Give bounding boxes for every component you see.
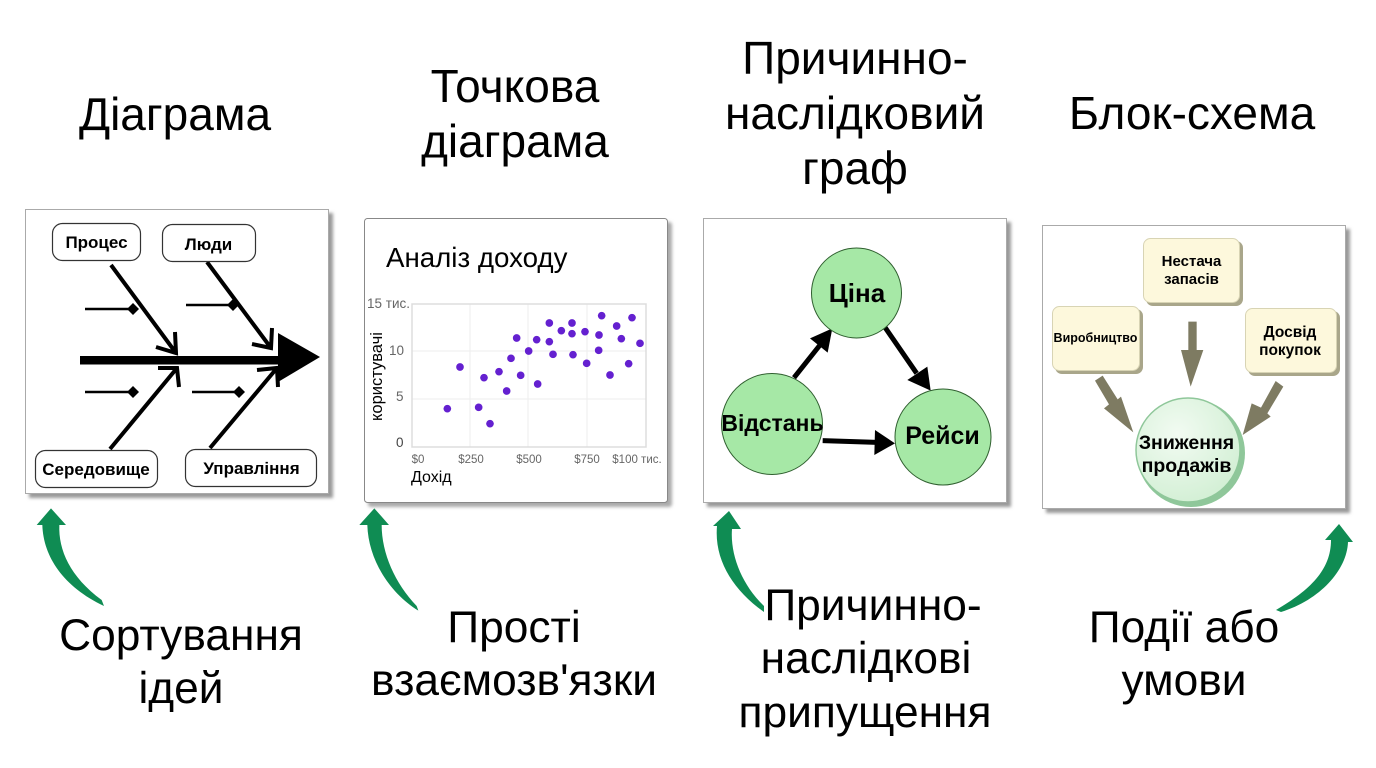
scatter points — [443, 312, 644, 427]
node: Зниження продажів: продажів — [1142, 455, 1231, 477]
box: Люди: Люди — [185, 235, 232, 254]
plot grid — [412, 304, 646, 447]
spine arrow — [80, 333, 320, 382]
heading: fishbone diagram: Діаграма — [79, 88, 271, 140]
caption: Сортування ідей: Сортування — [59, 611, 303, 660]
flow arrows — [1095, 322, 1283, 435]
node: Рейси — [895, 389, 991, 485]
caption: Сортування ідей: ідей — [138, 664, 224, 713]
caption: Причинно-наслідкові припущення: Причинно- — [764, 581, 982, 630]
y axis labels: 10 — [389, 343, 404, 358]
heading: causal graph: граф — [802, 142, 908, 194]
heading: flowchart: Блок-схема — [1069, 87, 1316, 139]
y axis title: користувачі — [368, 332, 386, 421]
box: Нестача запасів: Нестача — [1162, 253, 1222, 270]
box: Люди — [162, 224, 256, 262]
box: Процес — [52, 224, 140, 260]
box: Середовище — [36, 450, 158, 488]
y axis labels — [367, 296, 410, 450]
heading: scatter plot: діаграма — [421, 115, 609, 167]
node: Відстань: Відстань — [721, 410, 824, 436]
x axis title: Дохід — [411, 469, 452, 486]
box: Досвід покупок: Досвід — [1264, 324, 1317, 341]
arrow: green curved 3 — [713, 511, 764, 612]
heading: causal graph: наслідковий — [725, 87, 985, 139]
x axis labels: $100 тис. — [612, 454, 662, 466]
x axis labels: $0 — [412, 454, 424, 466]
caption: Прості взаємозв'язки: Прості — [447, 603, 581, 652]
arrows between nodes — [794, 327, 931, 455]
panel: flowchart — [1042, 226, 1350, 513]
x axis labels — [412, 454, 662, 466]
box: Досвід покупок — [1246, 308, 1340, 376]
y axis labels: 5 — [396, 389, 404, 404]
x axis labels: $500 — [516, 454, 542, 466]
caption: Прості взаємозв'язки: взаємозв'язки — [371, 656, 657, 705]
box: Управління — [186, 450, 316, 486]
caption: Події або умови: умови — [1121, 656, 1247, 705]
y axis labels: 0 — [396, 435, 404, 450]
panel: scatter plot — [364, 218, 672, 507]
caption: Події або умови: Події або — [1089, 603, 1279, 652]
caption: Причинно-наслідкові припущення: припущення — [738, 688, 992, 737]
node: Ціна — [812, 248, 902, 338]
box: Управління: Управління — [203, 459, 300, 478]
panel: fishbone diagram — [26, 210, 333, 498]
arrow: green curved 1 — [37, 508, 104, 606]
panel: causal graph — [704, 218, 1011, 507]
y axis labels: 15 тис. — [367, 296, 410, 311]
box: Нестача запасів — [1144, 238, 1243, 306]
heading: causal graph: Причинно- — [742, 32, 968, 84]
x axis labels: $250 — [458, 454, 484, 466]
box: Виробництво: Виробництво — [1054, 331, 1138, 345]
bones with arrowheads — [110, 262, 278, 449]
node: Відстань — [721, 374, 824, 474]
sub-causes with diamonds — [85, 299, 245, 398]
node: Зниження продажів — [1136, 398, 1245, 507]
box: Процес: Процес — [65, 233, 128, 252]
arrow: green curved 4 — [1276, 524, 1353, 612]
box: Середовище: Середовище — [42, 460, 150, 479]
arrow: green curved 2 — [359, 508, 418, 611]
node: Зниження продажів: Зниження — [1139, 432, 1234, 454]
box: Виробництво — [1052, 306, 1143, 374]
node: Рейси: Рейси — [905, 422, 980, 450]
box: Досвід покупок: покупок — [1259, 342, 1321, 359]
box: Нестача запасів: запасів — [1164, 271, 1219, 288]
x axis labels: $750 — [574, 454, 600, 466]
caption: Причинно-наслідкові припущення: наслідкові — [761, 634, 971, 683]
node: Ціна: Ціна — [829, 278, 886, 308]
chart title: Аналіз доходу — [386, 242, 568, 273]
heading: scatter plot: Точкова — [431, 60, 600, 112]
